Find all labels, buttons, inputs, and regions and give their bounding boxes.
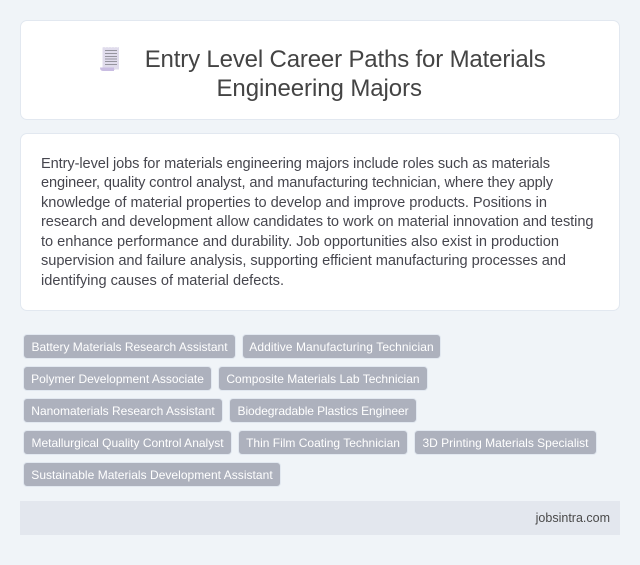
tag: [23, 334, 236, 359]
tag: [218, 366, 428, 391]
tag: Composite Materials Lab Technician: [226, 372, 420, 386]
tag: Metallurgical Quality Control Analyst: [31, 436, 224, 450]
footer source text: jobsintra.com: [536, 511, 610, 525]
description text: supervision and failure analysis, supporting efficient manufacturing processes and: [41, 253, 566, 269]
tag: [23, 366, 212, 391]
tag list: [23, 334, 597, 487]
icon: document scroll: [100, 47, 119, 71]
tag: [23, 462, 281, 487]
description text: research and development allow candidates to work on material innovation and testing: [41, 214, 594, 230]
description text: engineer, quality control analyst, and manufacturing technician, where they apply: [41, 175, 554, 191]
title: Engineering Majors: [216, 75, 422, 102]
description text: knowledge of material properties to develop and improve products. Positions in: [41, 195, 547, 211]
tag: Thin Film Coating Technician: [246, 436, 400, 450]
title: Entry Level Career Paths for Materials: [145, 46, 546, 73]
tag: [23, 398, 223, 423]
description panel: [20, 133, 620, 311]
footer bar: [20, 501, 620, 535]
tag: [238, 430, 408, 455]
description text: Entry-level jobs for materials engineering majors include roles such as materials: [41, 156, 550, 172]
tag: [23, 430, 232, 455]
description text: [41, 156, 594, 289]
tag: Additive Manufacturing Technician: [249, 340, 434, 354]
tag: Battery Materials Research Assistant: [31, 340, 228, 354]
tag: 3D Printing Materials Specialist: [422, 436, 589, 450]
header panel: [20, 20, 620, 120]
tag: [229, 398, 417, 423]
tag: Nanomaterials Research Assistant: [31, 404, 215, 418]
tag: Polymer Development Associate: [31, 372, 204, 386]
tag: Sustainable Materials Development Assistant: [31, 468, 273, 482]
tag: [242, 334, 441, 359]
tag: [414, 430, 597, 455]
tag: Biodegradable Plastics Engineer: [238, 404, 408, 418]
description text: to enhance performance and durability. Job opportunities also exist in production: [41, 234, 559, 250]
title: [145, 46, 546, 102]
description text: identifying causes of material defects.: [41, 273, 284, 289]
